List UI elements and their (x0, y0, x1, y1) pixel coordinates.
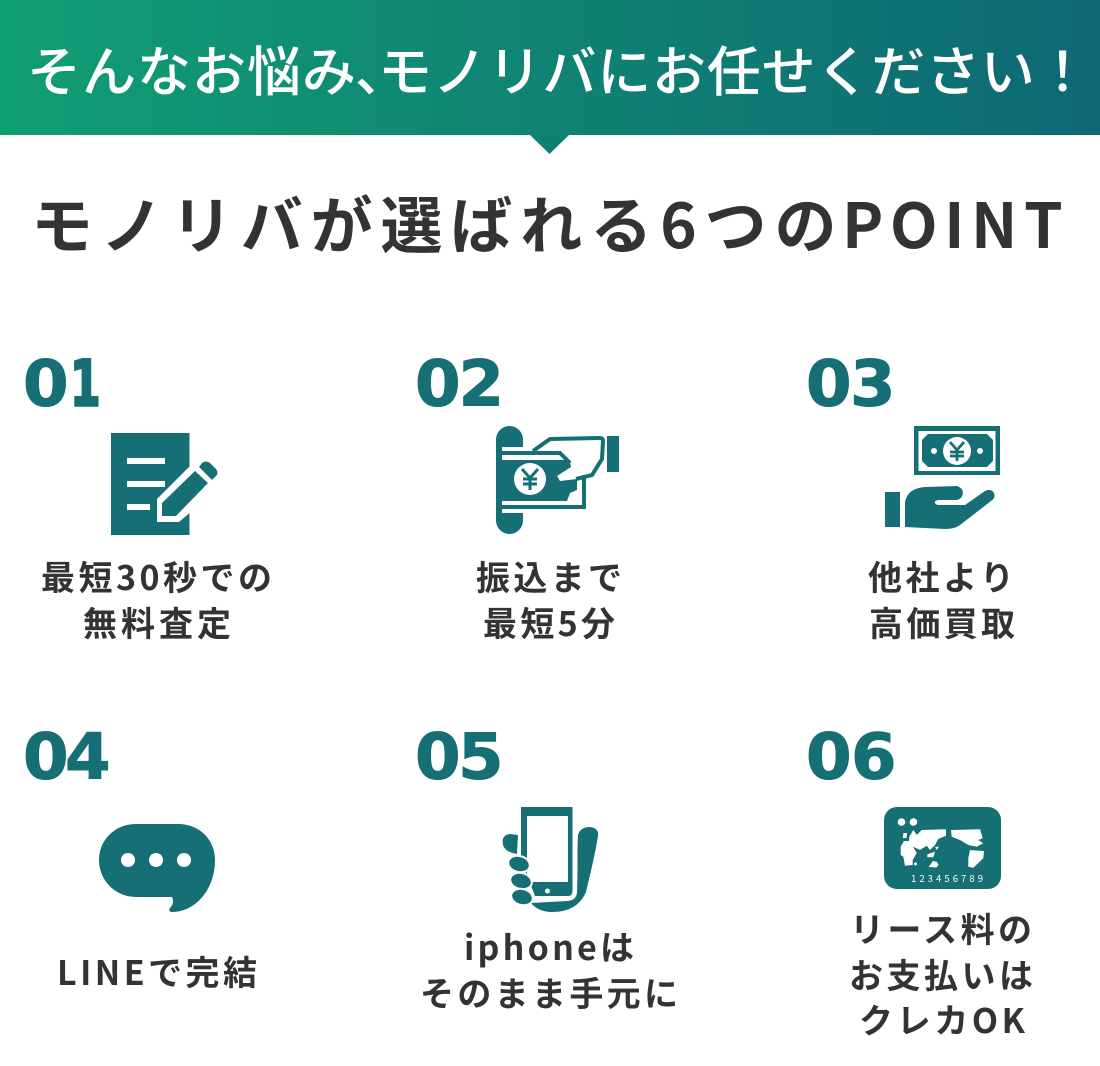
panel: point 03 (806, 348, 1015, 646)
number 01: 1 (70, 348, 101, 421)
panel: point 01 (23, 348, 272, 646)
icon: hand with banknote (496, 426, 619, 534)
number 02: 0 (415, 348, 461, 421)
label (420, 921, 678, 1016)
banner title: そんなお悩み (27, 28, 357, 107)
number 04 (23, 721, 111, 794)
number 03 (806, 348, 896, 421)
main heading: POINT (842, 176, 1069, 266)
number 06: 6 (851, 721, 897, 794)
number 05: 0 (415, 721, 461, 794)
label: 最短30秒での (41, 551, 272, 600)
number 06: 0 (806, 721, 852, 794)
label (41, 551, 272, 646)
icon: hand with banknote (885, 426, 1000, 529)
label (868, 551, 1015, 646)
number 04: 0 (23, 721, 69, 794)
panel: point 05 (415, 721, 678, 1016)
label (849, 903, 1033, 1043)
label: お支払いは (849, 949, 1033, 998)
label: 高価買取 (869, 597, 1015, 646)
number 05: 5 (458, 721, 504, 794)
number 01: 0 (23, 348, 69, 421)
main heading: モノリバが選ばれる6つの (31, 176, 844, 266)
number 02: 2 (458, 348, 504, 421)
label: そのまま手元に (420, 967, 678, 1016)
number 03: 0 (806, 348, 852, 421)
icon: document and pen (111, 433, 224, 535)
banner (0, 0, 1100, 154)
label: iphoneは (464, 921, 634, 970)
label: 最短5分 (483, 597, 615, 646)
panel: point 04 (23, 721, 257, 995)
number 06 (806, 721, 897, 794)
label (476, 551, 622, 646)
panel: point 06 (806, 721, 1033, 1043)
label: 他社より (868, 551, 1014, 600)
icon: credit card with world map: 123456789 (911, 871, 983, 885)
banner title (27, 28, 1090, 107)
label: 振込まで (476, 551, 622, 600)
banner title: 、 (355, 28, 410, 107)
banner title: モノリバにお任せください！ (378, 28, 1090, 107)
number 04: 4 (65, 721, 111, 794)
number 02 (415, 348, 504, 421)
panel: point 02 (415, 348, 622, 646)
icon: speech bubble (99, 824, 215, 912)
label: クレカOK (859, 994, 1026, 1043)
label: LINEで完結 (57, 946, 257, 995)
icon: credit card with world map (884, 807, 1001, 889)
label: 無料査定 (83, 597, 231, 646)
number 01 (23, 348, 101, 421)
label: リース料の (850, 903, 1032, 952)
number 05 (415, 721, 504, 794)
number 03: 3 (850, 348, 896, 421)
icon: hand holding smartphone (503, 807, 598, 912)
